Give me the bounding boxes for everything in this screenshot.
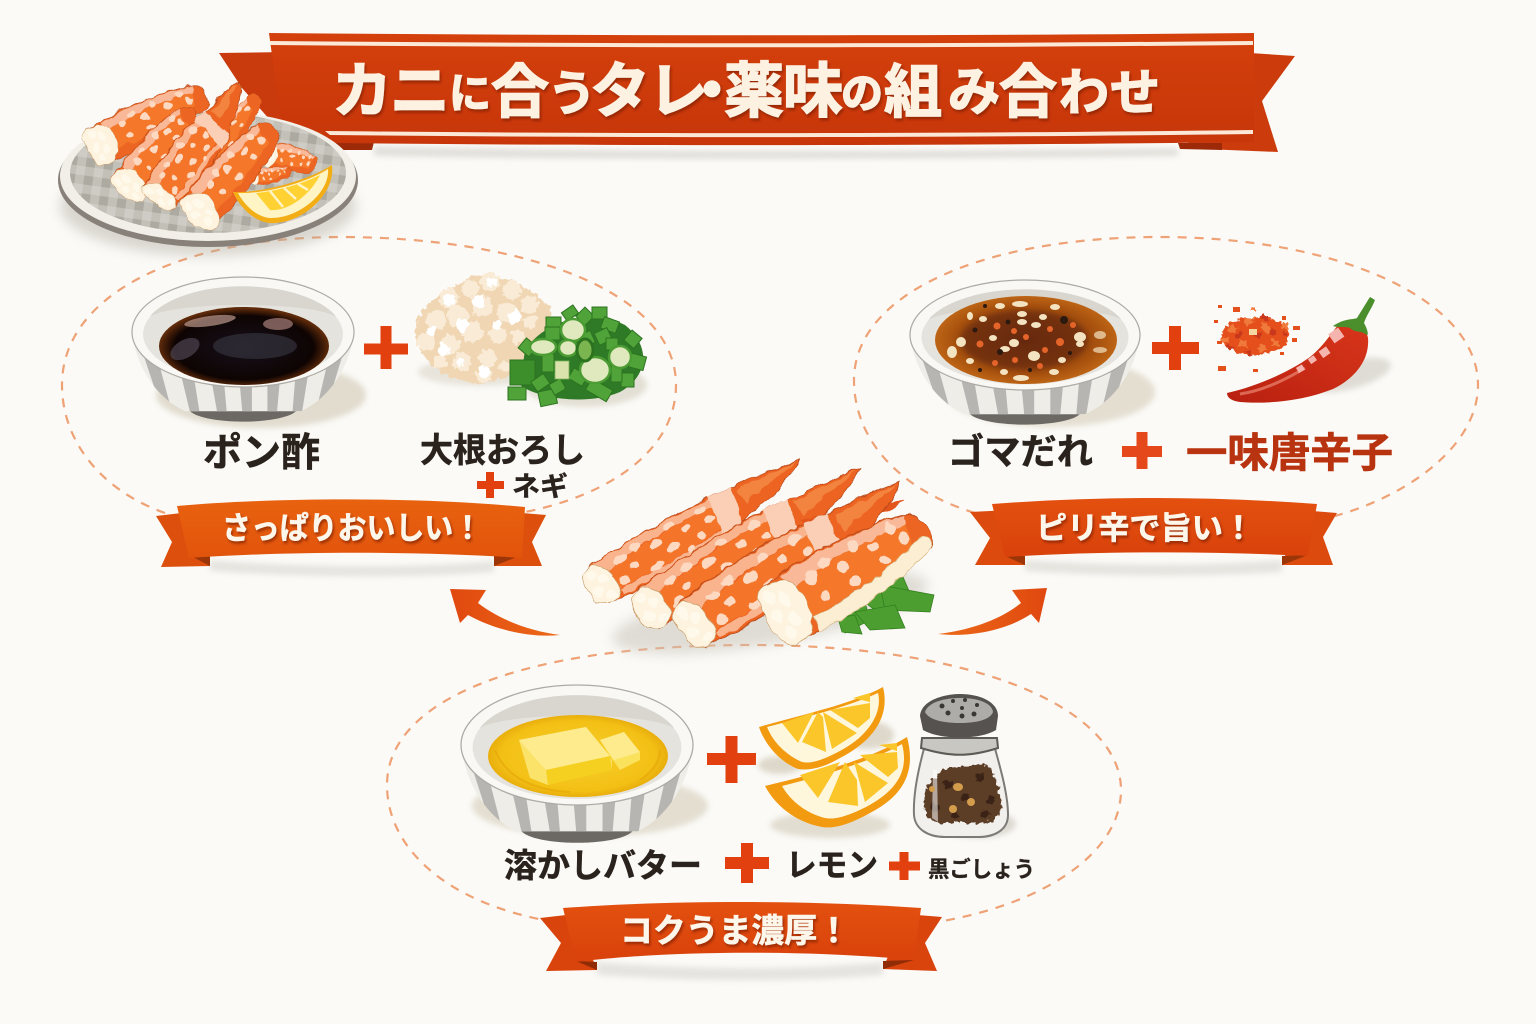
lemon wedge on plate (233, 165, 332, 223)
crab shadow (607, 553, 933, 671)
plus sign (1152, 326, 1199, 370)
label: sesame sauce: ゴマだれ (948, 431, 1093, 472)
title text: ・ (682, 58, 742, 125)
combination 1: ponzu (132, 272, 647, 576)
bowl: melted butter (461, 685, 708, 843)
plate of crab legs with lemon (58, 74, 358, 256)
title text: 薬味 (724, 58, 843, 125)
chili flakes (1214, 305, 1300, 372)
center crab legs with arrows (450, 447, 1047, 671)
dashed outline: butter group (387, 645, 1121, 922)
ribbon: rich (540, 902, 942, 980)
garnish leaves (835, 570, 934, 634)
chopped green onion (508, 305, 647, 407)
banner stripes (270, 41, 1253, 137)
title text: 合 (491, 60, 549, 125)
arrow: to sesame (938, 588, 1047, 635)
label: grated daikon: 大根おろし (420, 432, 585, 470)
title text: に (449, 70, 491, 117)
plus sign medium (725, 843, 769, 883)
plate (58, 111, 358, 256)
grated daikon (416, 272, 552, 386)
title banner (219, 33, 1295, 159)
title text: み (948, 64, 1000, 122)
plus sign (707, 736, 756, 783)
ribbon: refreshing: さっぱりおいしい！ (222, 511, 482, 546)
plus sign (364, 326, 408, 369)
title text: の (841, 70, 883, 117)
bowl: ponzu (132, 277, 366, 428)
title text: わせ (1059, 65, 1160, 121)
banner tails (219, 52, 1295, 152)
arrow: to ponzu (450, 589, 560, 636)
ribbon: refreshing (156, 499, 546, 576)
pepper shaker (914, 694, 1016, 838)
plus sign medium (1122, 432, 1162, 469)
bowl: sesame sauce (910, 280, 1155, 427)
ribbon: spicy: ピリ辛で旨い！ (1036, 511, 1254, 546)
plus sign small (889, 852, 920, 880)
ribbon: rich: コクうま濃厚！ (620, 912, 850, 949)
lemon wedges (758, 687, 910, 838)
label: black pepper: 黒ごしょう (928, 857, 1035, 882)
label: ponzu: ポン酢 (203, 432, 320, 475)
ribbon: spicy (970, 498, 1337, 576)
crab legs (575, 447, 946, 657)
title text: カニ (332, 58, 450, 125)
crab legs on plate (78, 74, 320, 236)
red chili pepper (1227, 297, 1394, 403)
label: ichimi chili: 一味唐辛子 (1186, 430, 1393, 476)
lemon wedge front (765, 737, 910, 827)
title text: 合 (999, 60, 1057, 125)
label: melted butter: 溶かしバター (504, 847, 702, 884)
combination 3: melted butter (461, 685, 1035, 980)
title text: タレ (590, 58, 708, 125)
title text: う (548, 68, 596, 121)
banner shadow (374, 146, 1178, 159)
lemon wedge back (759, 687, 885, 770)
dashed outline: ponzu group (62, 237, 676, 513)
banner body (269, 33, 1254, 145)
dashed outline: sesame group (854, 237, 1478, 516)
plus sign small (477, 472, 504, 498)
combination 2: sesame sauce (910, 280, 1394, 576)
title text: 組 (884, 60, 942, 125)
label: green onion: ネギ (512, 472, 568, 502)
label: lemon: レモン (786, 847, 878, 883)
title text (332, 58, 1160, 125)
